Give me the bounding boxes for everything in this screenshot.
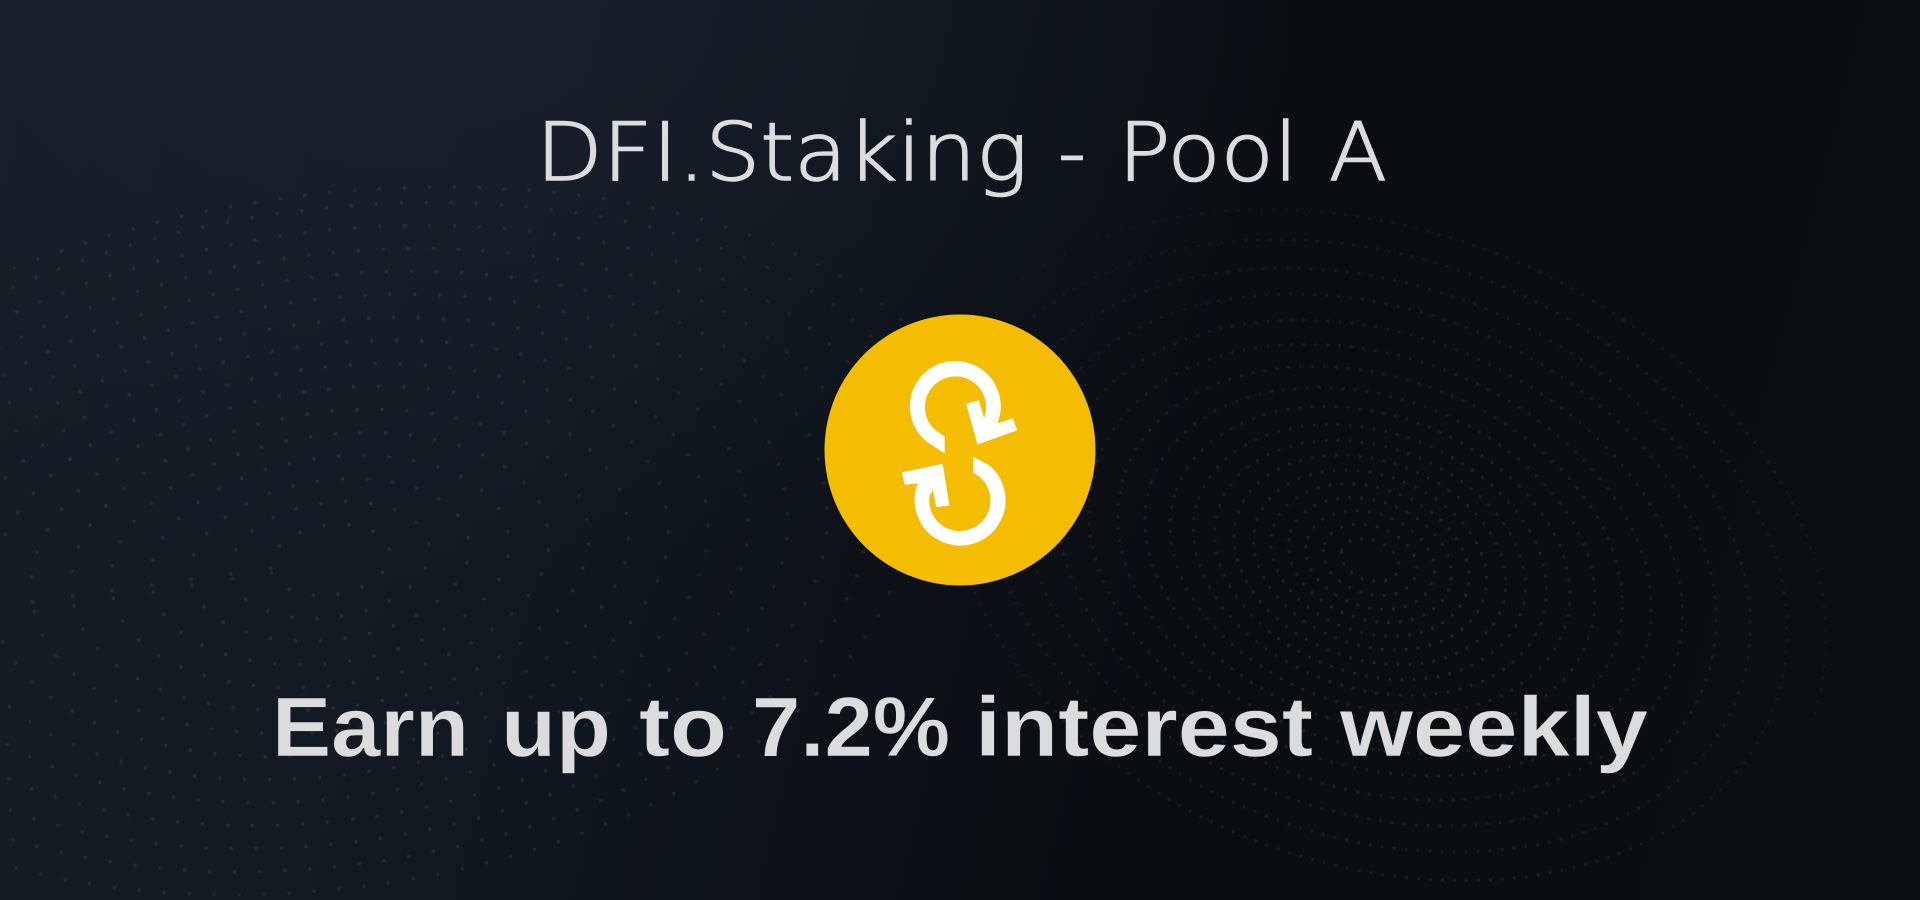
tagline: up: [501, 680, 611, 774]
dotted wave: left field: [0, 186, 902, 896]
tagline: to: [639, 680, 727, 774]
coin circle: [824, 314, 1096, 586]
upper loop arrow: [910, 361, 1017, 453]
tagline: weekly: [1339, 680, 1648, 774]
title: Pool: [1118, 106, 1298, 199]
lower loop arrow: [902, 457, 1005, 545]
tagline: [272, 680, 1648, 774]
title: [536, 106, 1387, 199]
title: DFI.Staking: [536, 106, 1028, 199]
tagline: Earn: [272, 680, 469, 774]
dotted wave: right swirl: [984, 208, 1814, 882]
title: A: [1329, 106, 1387, 199]
title: -: [1058, 106, 1086, 199]
icon: yellow coin with looping arrows: [824, 314, 1096, 586]
tagline: interest: [975, 680, 1313, 774]
tagline: 7.2%: [752, 680, 950, 774]
